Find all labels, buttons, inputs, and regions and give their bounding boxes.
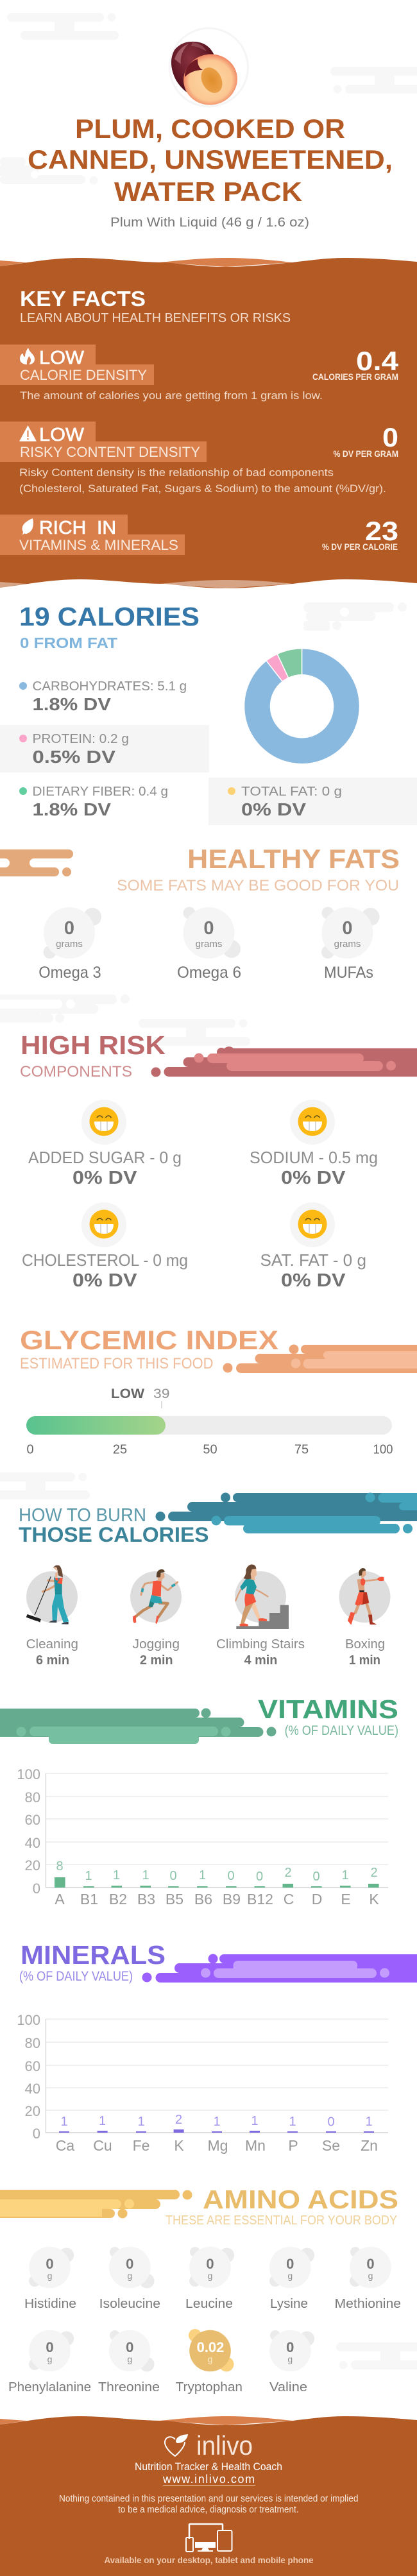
bar chart: minerals: 100 <box>17 2012 40 2028</box>
amino: phenylalanine <box>8 2330 91 2394</box>
decorative cloud: calories <box>303 602 407 631</box>
subheading: percent of daily value: (% OF DAILY VALUE) <box>19 1969 133 1984</box>
bar chart: minerals: 60 <box>25 2058 40 2074</box>
activity: cleaning <box>26 1565 78 1668</box>
disclaimer: to be a medical advice, diagnosis or treatment. <box>118 2504 299 2515</box>
fact: rich in vitamins and minerals <box>0 515 185 555</box>
bar chart: vitamins: B6 <box>194 1891 212 1907</box>
stat: omega 6: Omega 6 <box>177 964 241 982</box>
stat: mufas: MUFAs <box>324 964 373 982</box>
amino: isoleucine: 0 <box>126 2256 133 2272</box>
key facts heading: KEY FACTS <box>20 287 146 311</box>
title: PLUM, COOKED OR <box>75 114 345 144</box>
bar chart: vitamins: 2 <box>370 1866 378 1880</box>
activity: jogging <box>130 1569 182 1668</box>
amino: methionine: Methionine <box>335 2297 401 2311</box>
serving size subtitle: Plum With Liquid (46 g / 1.6 oz) <box>110 216 309 230</box>
bar chart: vitamins: 0 <box>227 1869 235 1883</box>
heading: 19 calories: 19 CALORIES <box>19 602 200 631</box>
amino: isoleucine <box>99 2247 160 2311</box>
amino: valine: Valine <box>269 2380 307 2394</box>
panel: high risk components <box>20 1030 417 1291</box>
key facts subheading: LEARN ABOUT HEALTH BENEFITS OR RISKS <box>20 311 291 325</box>
bar chart: vitamins: C <box>284 1891 294 1907</box>
amino: phenylalanine: 0 <box>46 2339 54 2355</box>
item: added sugar: 0% DV <box>72 1168 137 1188</box>
logo: heart and leaf <box>165 2434 188 2456</box>
food image: plum <box>169 28 248 109</box>
value: 0: 0 <box>382 422 398 452</box>
amino: tryptophan: 0.02 <box>197 2339 224 2355</box>
amino: methionine: 0 <box>366 2256 375 2272</box>
bar chart: minerals: Se <box>322 2137 340 2154</box>
item: saturated fat <box>260 1202 366 1291</box>
label: calorie density: CALORIE DENSITY <box>20 367 147 383</box>
panel: footer <box>0 2416 417 2576</box>
icon: flame <box>20 348 35 364</box>
bar chart: vitamins: 0 <box>169 1869 177 1883</box>
row: dietary fiber: DIETARY FIBER: 0.4 g <box>32 785 168 799</box>
item: cholesterol: CHOLESTEROL - 0 mg <box>22 1250 188 1270</box>
stat: omega 6: 0 <box>203 918 214 939</box>
label: vitamins and minerals: VITAMINS & MINERALS <box>19 537 178 553</box>
fact: risky content density <box>0 422 334 479</box>
amino: leucine: 0 <box>206 2256 214 2272</box>
bar chart: vitamins: 20 <box>25 1857 40 1873</box>
amino: tryptophan: g <box>208 2354 212 2364</box>
website link: www.inlivo.com <box>162 2473 255 2486</box>
item: sodium <box>250 1100 378 1188</box>
panel: minerals <box>17 1940 417 2154</box>
bar chart: vitamins: 1 <box>113 1868 120 1882</box>
heading: amino acids: AMINO ACIDS <box>203 2185 398 2214</box>
panel: amino acids <box>0 2185 401 2394</box>
unit: calories per gram: CALORIES PER GRAM <box>312 371 398 382</box>
header decoration <box>151 1046 417 1077</box>
label: rich in: RICH IN <box>39 518 116 538</box>
amino: leucine: Leucine <box>185 2297 233 2311</box>
panel: healthy fats <box>0 844 400 982</box>
heading: glycemic index: GLYCEMIC INDEX <box>20 1325 278 1355</box>
row: protein <box>0 725 209 772</box>
title: CANNED, UNSWEETENED, <box>28 144 393 175</box>
icon: devices <box>186 2524 232 2552</box>
unit: % dv per gram: % DV PER GRAM <box>334 448 398 459</box>
gauge marker <box>161 1401 162 1408</box>
decorative cloud: burn section <box>0 1472 90 1499</box>
subheading: ESTIMATED FOR THIS FOOD <box>20 1355 213 1372</box>
panel: vitamins <box>0 1694 398 1907</box>
disclaimer: Nothing contained in this presentation and our services is intended or implied <box>59 2493 358 2504</box>
amino: threonine <box>98 2330 160 2394</box>
row: total fat <box>208 778 417 825</box>
row: carbohydrates: 1.8% DV <box>32 694 111 714</box>
decorative cloud: left of high risk <box>0 994 130 1023</box>
amino: methionine <box>335 2247 401 2311</box>
bar chart: vitamins: B1 <box>80 1891 98 1907</box>
bar chart: vitamins: 1 <box>142 1868 149 1882</box>
icon: warning triangle <box>19 425 37 441</box>
stat: mufas: grams <box>334 939 361 950</box>
unit: % dv per calorie: % DV PER CALORIE <box>322 542 398 552</box>
heading: how to burn: HOW TO BURN <box>19 1505 146 1526</box>
bar chart: vitamins: 60 <box>25 1812 40 1828</box>
row: carbohydrates <box>19 679 187 714</box>
amino: threonine: 0 <box>126 2339 133 2355</box>
title: WATER PACK <box>114 176 302 207</box>
icon: person jogging <box>133 1569 178 1624</box>
heading: minerals: MINERALS <box>21 1940 166 1970</box>
bar chart: vitamins: A <box>55 1891 65 1907</box>
bar chart: vitamins: K <box>369 1891 379 1907</box>
row: dietary fiber: 1.8% DV <box>32 799 111 819</box>
amino: histidine <box>24 2247 76 2311</box>
header decoration <box>0 849 73 876</box>
amino: valine <box>269 2330 314 2394</box>
bar chart: vitamins: 0 <box>312 1870 320 1884</box>
amino: threonine: g <box>127 2354 132 2364</box>
bar chart: minerals: 1 <box>251 2114 259 2128</box>
gauge axis labels <box>26 1442 393 1456</box>
bar chart: minerals: Mn <box>245 2137 266 2154</box>
label: low: LOW <box>39 348 85 368</box>
bar chart: vitamins: 100 <box>17 1766 40 1782</box>
bar chart: minerals: Mg <box>208 2137 228 2154</box>
gauge axis labels: 0 <box>26 1442 34 1456</box>
bar chart: vitamins: 0 <box>256 1870 263 1884</box>
bar chart: minerals: Fe <box>133 2137 149 2154</box>
icon: person boxing <box>348 1568 384 1625</box>
amino: phenylalanine: Phenylalanine <box>8 2380 91 2394</box>
stat: omega 3: Omega 3 <box>38 964 101 982</box>
item: added sugar <box>28 1100 182 1188</box>
gauge label: low: LOW <box>111 1386 144 1401</box>
amino: lysine: Lysine <box>270 2297 308 2311</box>
tagline: Nutrition Tracker & Health Coach <box>135 2461 282 2473</box>
amino: histidine: Histidine <box>24 2297 76 2311</box>
amino: histidine: 0 <box>46 2256 54 2272</box>
stat: omega 3: grams <box>56 939 83 950</box>
bar chart: minerals: 80 <box>25 2035 40 2051</box>
stat: mufas <box>321 907 380 982</box>
amino: valine: g <box>287 2354 293 2364</box>
bar chart: vitamins: B9 <box>223 1891 241 1907</box>
bar chart: minerals: 40 <box>25 2081 40 2097</box>
amino: leucine: g <box>208 2271 212 2281</box>
item: saturated fat: SAT. FAT - 0 g <box>260 1250 366 1270</box>
item: cholesterol <box>22 1202 188 1291</box>
subheading: 0 from fat: 0 FROM FAT <box>20 635 117 651</box>
row: total fat: 0% DV <box>241 799 306 819</box>
value: 1 min: 1 min <box>349 1653 380 1668</box>
stat: omega 6 <box>177 907 241 982</box>
bar chart: minerals: 0 <box>33 2126 40 2142</box>
heading: vitamins: VITAMINS <box>258 1694 398 1724</box>
icon: person cleaning <box>26 1565 69 1625</box>
subheading: THESE ARE ESSENTIAL FOR YOUR BODY <box>166 2213 397 2228</box>
row: carbohydrates: CARBOHYDRATES: 5.1 g <box>32 679 187 694</box>
bar chart: minerals: Zn <box>361 2137 378 2154</box>
bar chart: vitamins: 80 <box>25 1789 40 1805</box>
amino: isoleucine: Isoleucine <box>99 2297 160 2311</box>
bar chart: minerals: 1 <box>289 2115 296 2129</box>
amino: phenylalanine: g <box>47 2354 52 2364</box>
heading: those calories: THOSE CALORIES <box>19 1523 209 1546</box>
panel: glycemic index <box>20 1325 417 1456</box>
stat: omega 3 <box>38 907 101 982</box>
logo wordmark: inlivo: inlivo <box>196 2430 253 2461</box>
bar chart: vitamins: E <box>341 1891 351 1907</box>
title <box>28 114 393 207</box>
bar chart: vitamins: 8 <box>56 1859 64 1873</box>
item: cholesterol: 0% DV <box>72 1270 137 1291</box>
label: low: LOW <box>39 425 85 445</box>
item: sodium: SODIUM - 0.5 mg <box>250 1148 378 1167</box>
gauge axis labels: 100 <box>373 1442 393 1456</box>
row: total fat: TOTAL FAT: 0 g <box>241 785 342 799</box>
gauge value: 39: 39 <box>153 1386 169 1401</box>
amino: valine: 0 <box>286 2339 294 2355</box>
bar chart: minerals: K <box>174 2137 184 2154</box>
panel: key facts <box>0 258 417 597</box>
bar chart: vitamins <box>17 1766 388 1907</box>
description: Risky Content density is the relationship of bad components <box>19 466 334 479</box>
bar chart: minerals: 2 <box>175 2113 182 2127</box>
value: 4 min: 4 min <box>244 1653 277 1668</box>
amino: tryptophan: Tryptophan <box>176 2380 243 2394</box>
panel: calories <box>0 602 417 825</box>
availability note: Available on your desktop, tablet and mobile phone <box>104 2555 314 2565</box>
amino: lysine: g <box>287 2271 293 2281</box>
decorative cloud: center of high risk <box>139 1019 250 1046</box>
header decoration <box>155 1492 417 1533</box>
bar chart: minerals: Cu <box>93 2137 112 2154</box>
label: risky content density: RISKY CONTENT DENSITY <box>20 444 200 460</box>
fact: calorie density <box>0 345 399 402</box>
heading: high risk: HIGH RISK <box>21 1030 166 1060</box>
header decoration <box>0 2190 192 2219</box>
row: dietary fiber <box>19 785 168 819</box>
activity: climbing stairs <box>216 1564 305 1668</box>
bar chart: vitamins: 40 <box>25 1835 40 1851</box>
decorative cloud: lower right <box>336 2342 417 2369</box>
amino: lysine <box>269 2247 314 2311</box>
value: 23: 23 <box>365 516 398 546</box>
item: saturated fat: 0% DV <box>281 1270 346 1291</box>
amino: leucine <box>185 2247 234 2311</box>
subheading: SOME FATS MAY BE GOOD FOR YOU <box>117 877 399 894</box>
label: climbing stairs: Climbing Stairs <box>216 1637 305 1651</box>
amino: lysine: 0 <box>286 2256 294 2272</box>
panel: how to burn those calories <box>19 1492 417 1668</box>
bar chart: vitamins: 0 <box>33 1881 40 1897</box>
description: The amount of calories you are getting from 1 gram is low. <box>20 389 323 402</box>
header decoration <box>0 1708 276 1744</box>
gauge axis labels: 25 <box>113 1442 127 1456</box>
value: 2 min: 2 min <box>140 1653 173 1668</box>
header decoration <box>223 1345 417 1373</box>
amino: histidine: g <box>47 2271 52 2281</box>
row: protein: 0.5% DV <box>32 747 115 767</box>
bar chart: minerals: Ca <box>56 2137 74 2154</box>
amino: methionine: g <box>368 2271 373 2281</box>
gauge axis labels: 75 <box>294 1442 309 1456</box>
gauge bar <box>26 1416 392 1435</box>
amino: tryptophan <box>176 2329 243 2394</box>
bar chart: minerals <box>17 2012 388 2154</box>
bar chart: vitamins: 2 <box>284 1866 292 1880</box>
icon: person climbing stairs <box>235 1564 289 1629</box>
activity: boxing <box>339 1568 390 1668</box>
bar chart: vitamins: B3 <box>137 1891 155 1907</box>
bar chart: vitamins: 1 <box>341 1868 349 1882</box>
bar chart: vitamins: D <box>312 1891 322 1907</box>
item: added sugar: ADDED SUGAR - 0 g <box>28 1148 182 1167</box>
donut chart: calorie sources <box>244 649 360 764</box>
heading: healthy fats: HEALTHY FATS <box>187 844 400 874</box>
disclaimer <box>59 2493 358 2515</box>
warning mark <box>27 431 28 440</box>
bar chart: minerals: 0 <box>327 2115 335 2129</box>
label: jogging: Jogging <box>132 1637 180 1651</box>
stat: omega 6: grams <box>196 939 222 950</box>
stat: omega 3: 0 <box>64 918 74 939</box>
subheading: percent of daily value: (% OF DAILY VALUE) <box>285 1723 398 1738</box>
bar chart: minerals: 1 <box>60 2115 68 2129</box>
label: boxing: Boxing <box>345 1637 385 1651</box>
subheading: components: COMPONENTS <box>20 1063 132 1080</box>
bar chart: minerals: 1 <box>365 2115 373 2129</box>
bar chart: vitamins: B5 <box>166 1891 183 1907</box>
amino: isoleucine: g <box>127 2271 132 2281</box>
row: protein: PROTEIN: 0.2 g <box>32 732 129 746</box>
description line 2: (Cholesterol, Saturated Fat, Sugars & Sodium) to the amount (%DV/gr). <box>19 482 386 495</box>
decorative cloud: top right <box>330 67 417 94</box>
bar chart: vitamins: 1 <box>199 1868 206 1882</box>
bar chart: vitamins: B12 <box>247 1891 273 1907</box>
bar chart: vitamins: B2 <box>109 1891 127 1907</box>
item: sodium: 0% DV <box>281 1168 346 1188</box>
header decoration <box>142 1954 417 1983</box>
stat: mufas: 0 <box>342 918 353 939</box>
value: 6 min: 6 min <box>36 1653 69 1668</box>
label: cleaning: Cleaning <box>26 1637 78 1651</box>
decorative cloud: top left <box>7 13 119 40</box>
bar chart: minerals: 1 <box>213 2115 221 2129</box>
amino: threonine: Threonine <box>98 2380 160 2394</box>
bar chart: minerals: 1 <box>137 2115 145 2129</box>
bar chart: minerals: 20 <box>25 2103 40 2119</box>
decorative cloud: behind title <box>0 157 98 185</box>
icon: leaf <box>22 518 33 535</box>
bar chart: vitamins: 1 <box>85 1869 92 1883</box>
bar chart: minerals: 1 <box>99 2114 106 2128</box>
value: 0.4 calories per gram: 0.4 <box>356 346 399 376</box>
gauge axis labels: 50 <box>203 1442 217 1456</box>
bar chart: minerals: P <box>288 2137 298 2154</box>
